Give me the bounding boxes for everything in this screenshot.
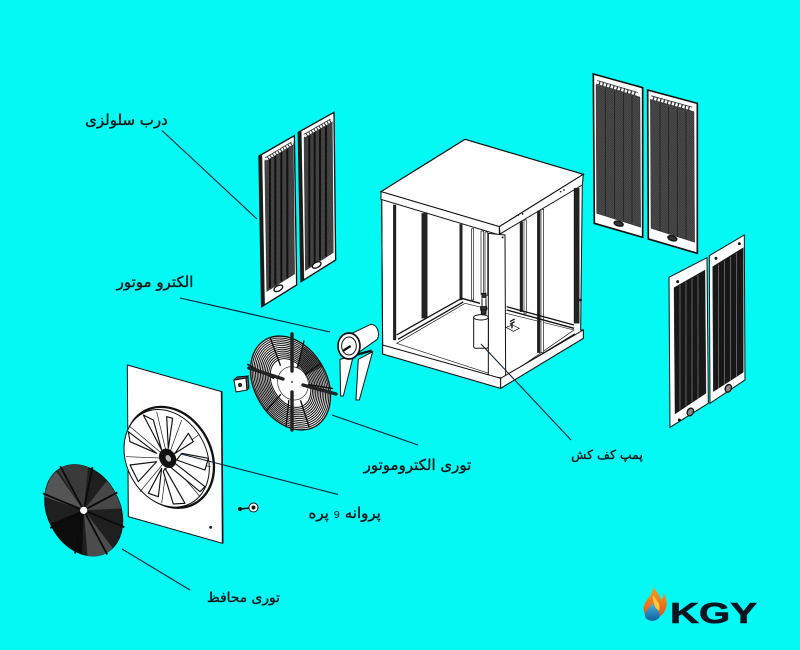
logo flame [644, 587, 667, 621]
capacitor box [234, 376, 249, 392]
door 2 [298, 112, 336, 282]
fan mounting panel [127, 365, 223, 543]
rivets [502, 189, 582, 301]
panel: lower right cellulose doors [669, 235, 745, 427]
floor [397, 303, 574, 378]
left post [380, 199, 384, 345]
float pump [474, 293, 488, 348]
water plug [238, 503, 258, 512]
leader line: pump [481, 344, 571, 440]
label: nine blade fan: پروانه 9 پره [309, 504, 381, 523]
floor rails [397, 298, 575, 377]
electromotor [338, 325, 379, 400]
top lid [381, 139, 583, 227]
door 1 [259, 136, 297, 307]
floor drain [506, 319, 519, 331]
door A [593, 74, 643, 237]
wire guard mounting bars [249, 334, 336, 430]
motor legs [340, 356, 353, 396]
leader line: motor guard [332, 415, 418, 445]
logo wordmark: KGY [670, 598, 757, 630]
leader line: nine blade fan [181, 454, 338, 494]
motor body [345, 325, 379, 355]
base frame [383, 330, 583, 388]
front post [488, 233, 506, 378]
label: motor guard: توری الکتروموتور [363, 456, 471, 474]
panel: cooler cabinet [381, 139, 583, 388]
back wall bars [393, 188, 579, 353]
panel: upper right cellulose doors [593, 74, 697, 253]
logo: KGY [644, 587, 757, 630]
door C [669, 258, 708, 427]
label: electromotor: الکترو موتور [116, 273, 193, 291]
door D [709, 235, 745, 403]
leader line: cellulose door [162, 130, 257, 219]
cabinet body [381, 139, 583, 388]
fan hub [156, 446, 180, 471]
nine blade fan [107, 391, 231, 523]
wire guard hub [272, 362, 314, 405]
motor face [338, 333, 360, 359]
label: pump: پمپ کف کش [571, 447, 643, 463]
door B [648, 90, 697, 253]
electromotor wire guard [234, 322, 347, 444]
top frame edges [381, 174, 583, 235]
leader line: protective guard [122, 549, 190, 590]
leader line: electromotor [180, 298, 330, 332]
panel: left cellulose doors [259, 112, 336, 307]
label: protective guard: توری محافظ [207, 590, 280, 606]
front protective guard [27, 448, 141, 572]
label: cellulose door: درب سلولزی [85, 111, 168, 129]
